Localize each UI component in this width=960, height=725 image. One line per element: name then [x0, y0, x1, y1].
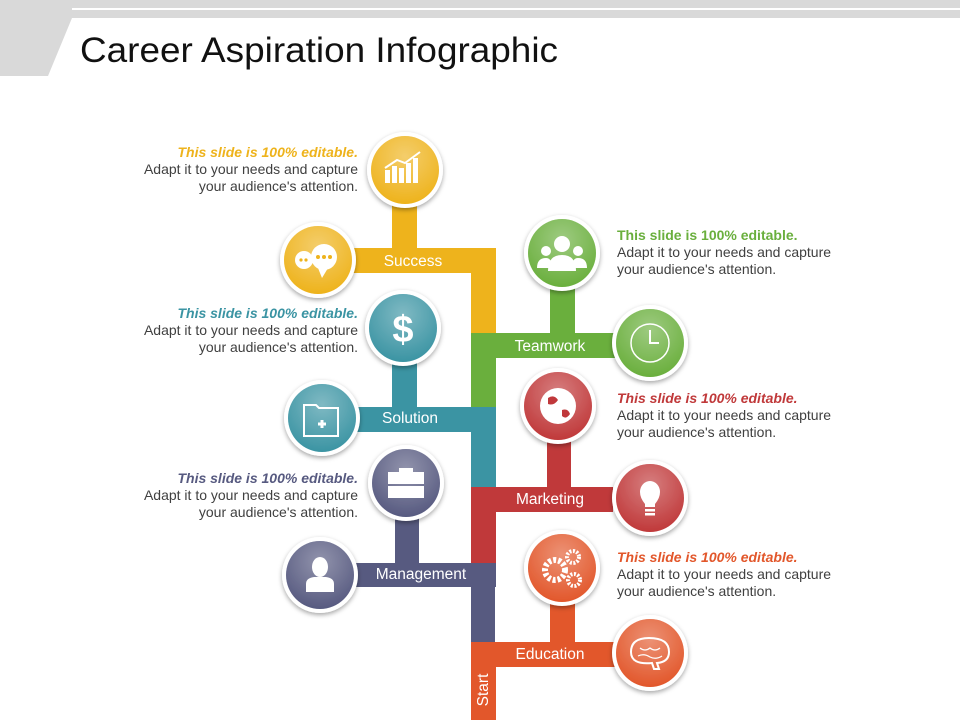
- text: success: your audience's attention.: [199, 178, 358, 194]
- text: management: your audience's attention.: [199, 504, 358, 520]
- text: success: This slide is 100% editable.: [177, 144, 358, 160]
- icon: person (management): [282, 537, 358, 613]
- text: solution: This slide is 100% editable.: [177, 305, 358, 321]
- branch labels: Start: [475, 673, 492, 706]
- tree: education branch: [471, 600, 615, 720]
- branch labels: Success: [384, 253, 443, 270]
- text: teamwork: your audience's attention.: [617, 261, 776, 277]
- branch labels: Management: [376, 566, 467, 583]
- tree: teamwork branch: [471, 285, 615, 409]
- text: management: This slide is 100% editable.: [177, 470, 358, 486]
- icon: team (teamwork): [524, 215, 600, 291]
- branch labels: Marketing: [516, 491, 584, 508]
- branch labels: Education: [516, 646, 584, 663]
- text: teamwork: This slide is 100% editable.: [617, 227, 798, 243]
- icon: globe (marketing): [520, 368, 596, 444]
- text: teamwork: [617, 227, 831, 277]
- text: marketing: This slide is 100% editable.: [617, 390, 798, 406]
- branch labels: [376, 253, 586, 706]
- icon: chat (success): [280, 222, 356, 298]
- icon: brain (education): [612, 615, 688, 691]
- text: solution: your audience's attention.: [199, 339, 358, 355]
- branch labels: Solution: [382, 410, 438, 427]
- icon: dollar (solution): [365, 290, 441, 366]
- text: teamwork: Adapt it to your needs and capture: [617, 244, 831, 260]
- title: Career Aspiration Infographic: [80, 30, 558, 70]
- icon: briefcase (management): [368, 445, 444, 521]
- header band: [0, 0, 960, 76]
- text: education: This slide is 100% editable.: [617, 549, 798, 565]
- tree: success branch: [353, 200, 496, 336]
- text: marketing: your audience's attention.: [617, 424, 776, 440]
- text: marketing: [617, 390, 831, 440]
- text: management: [144, 470, 358, 520]
- tree: management branch: [353, 515, 496, 644]
- text: success: Adapt it to your needs and capture: [144, 161, 358, 177]
- icon: clock (teamwork): [612, 305, 688, 381]
- icon: dollar (solution): $: [392, 309, 414, 351]
- text: marketing: Adapt it to your needs and capture: [617, 407, 831, 423]
- text: management: Adapt it to your needs and capture: [144, 487, 358, 503]
- icon: bulb (marketing): [612, 460, 688, 536]
- text: success: [144, 144, 358, 194]
- text: education: your audience's attention.: [617, 583, 776, 599]
- tree: solution branch: [345, 360, 496, 489]
- icon: bar chart (success): [367, 132, 443, 208]
- branch labels: Teamwork: [515, 338, 586, 355]
- text: education: Adapt it to your needs and capture: [617, 566, 831, 582]
- text: solution: Adapt it to your needs and capture: [144, 322, 358, 338]
- tree: marketing branch: [471, 440, 613, 565]
- icon: folder (solution): [284, 380, 360, 456]
- text: solution: [144, 305, 358, 355]
- icon: gears (education): [524, 530, 600, 606]
- text: education: [617, 549, 831, 599]
